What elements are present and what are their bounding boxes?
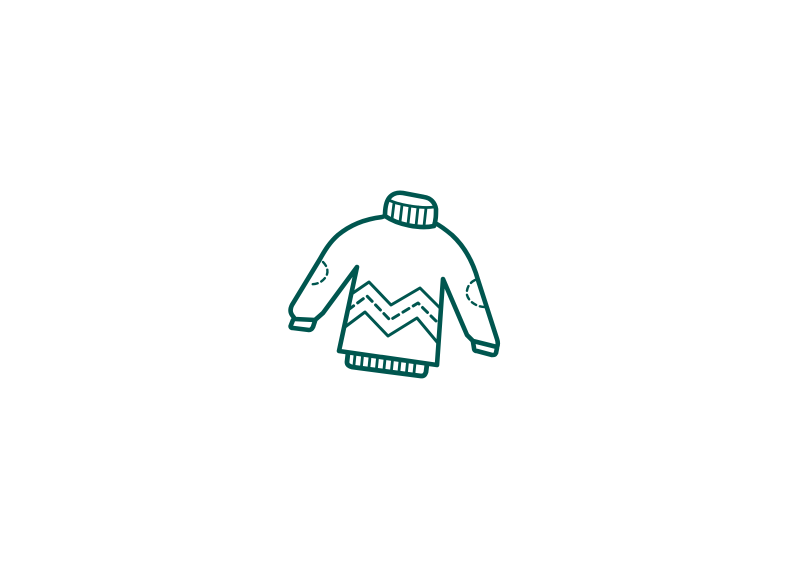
hem ribbing xyxy=(347,353,427,376)
sweater outline: shoulders and sleeves xyxy=(290,216,498,365)
lower zigzag xyxy=(345,312,437,342)
icon: sweater xyxy=(290,193,498,376)
dashed zigzag xyxy=(348,296,438,323)
right elbow patch xyxy=(467,280,485,307)
collar xyxy=(385,193,436,227)
right cuff xyxy=(473,342,497,355)
upper zigzag xyxy=(353,282,440,308)
left cuff xyxy=(291,320,315,330)
left elbow patch xyxy=(309,262,327,284)
